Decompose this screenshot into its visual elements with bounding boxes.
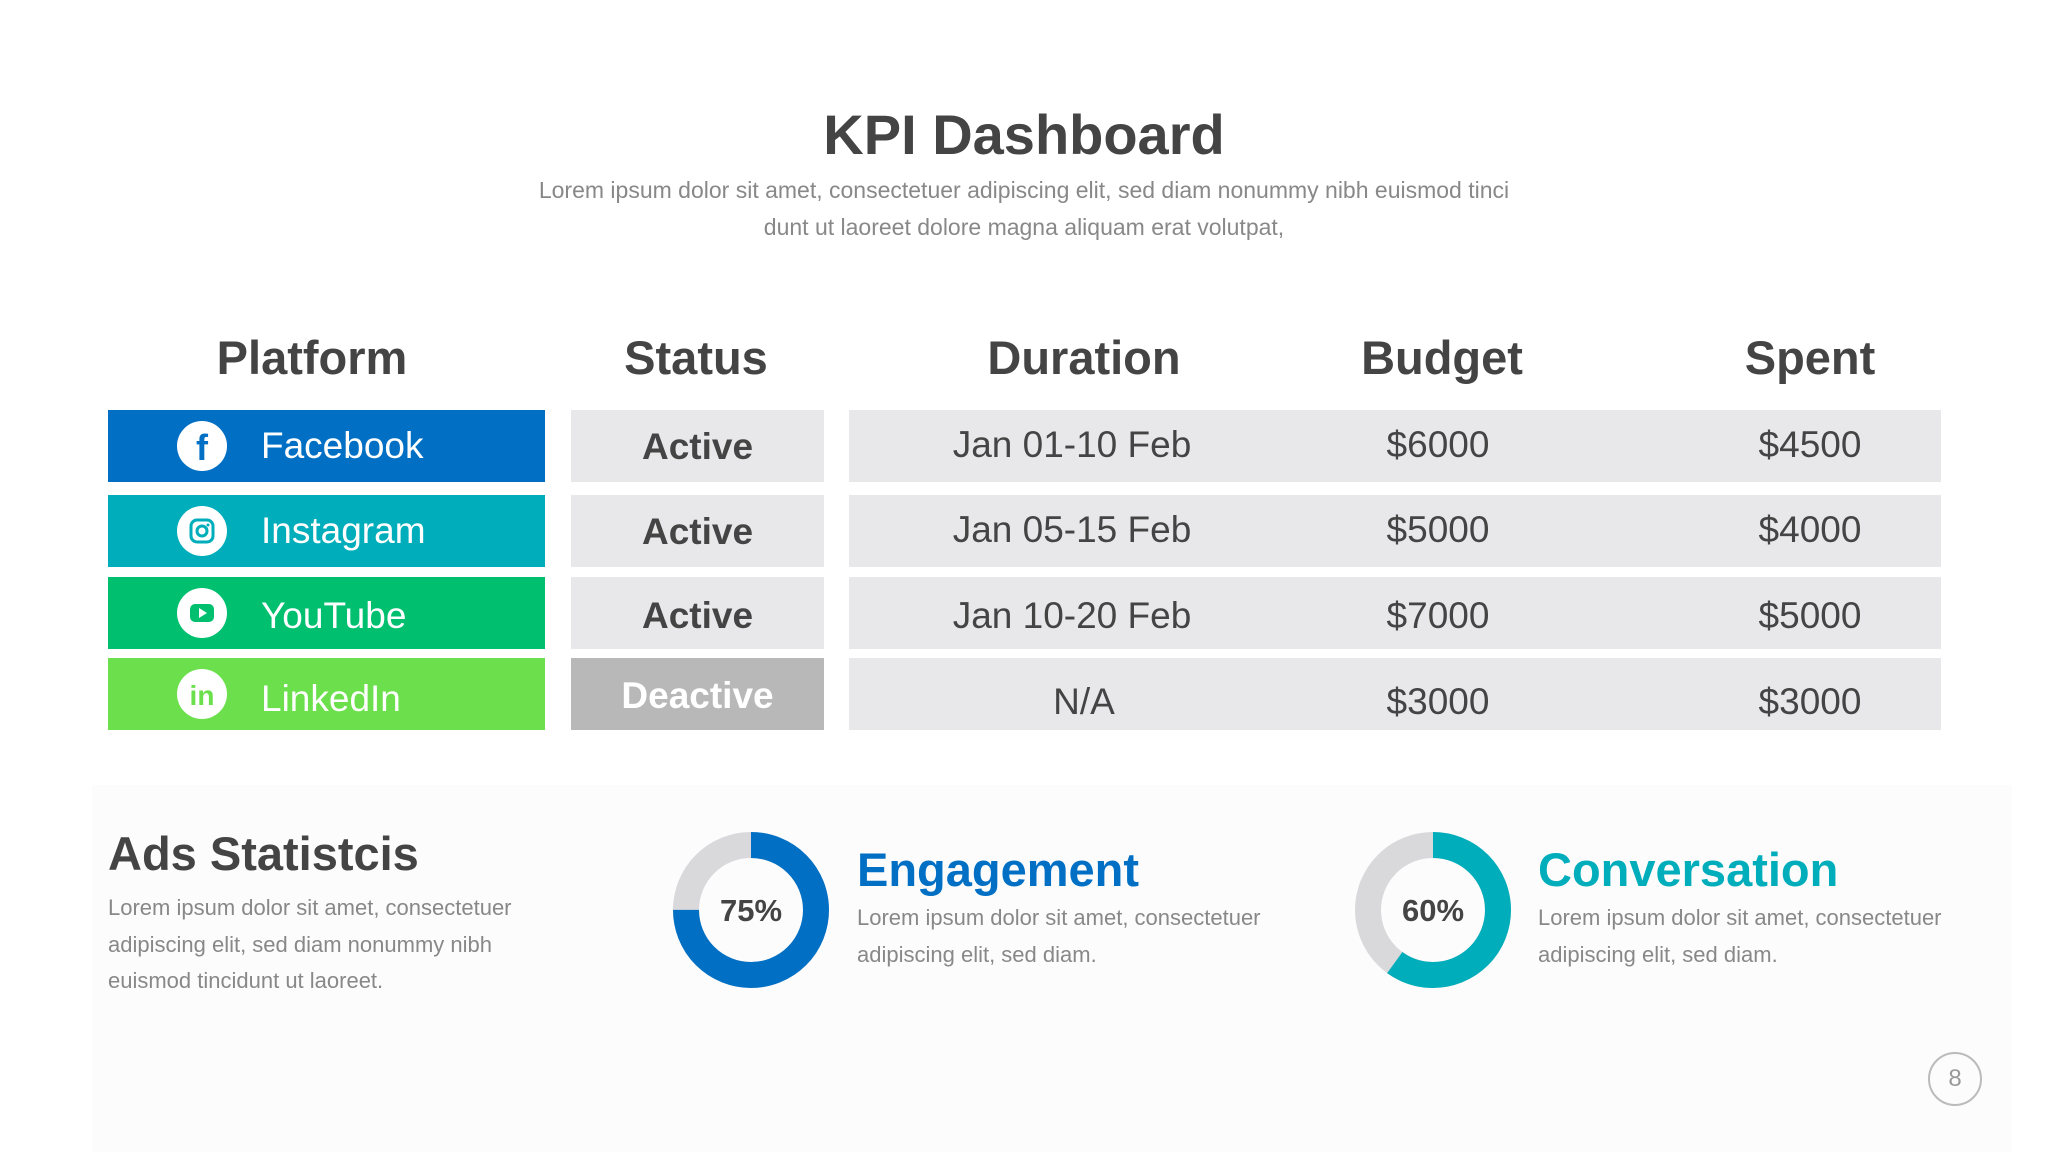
conversation text: Lorem ipsum dolor sit amet, consectetuer adipiscing elit, sed diam. xyxy=(1538,905,1942,967)
conversation heading: Conversation xyxy=(1538,843,1838,896)
page number xyxy=(1928,1052,1982,1106)
subtitle: Lorem ipsum dolor sit amet, consectetuer adipiscing elit, sed diam nonummy nibh euismod tinci xyxy=(539,177,1509,203)
data row 4: $3000 xyxy=(1387,681,1489,722)
ads statistics text: Lorem ipsum dolor sit amet, consectetuer adipiscing elit, sed diam nonummy nibh euismod tincidunt ut laoreet. xyxy=(108,895,512,993)
data row 4: $3000 xyxy=(1759,681,1861,722)
header: status: Status xyxy=(624,331,768,384)
data row 3: $7000 xyxy=(1387,595,1489,636)
platform: instagram: Instagram xyxy=(261,510,426,551)
data row 3: $5000 xyxy=(1759,595,1861,636)
platform: linkedin xyxy=(108,658,545,730)
data row 3: Jan 10-20 Feb xyxy=(953,595,1191,636)
header: spent: Spent xyxy=(1745,331,1875,384)
platform: youtube xyxy=(108,577,545,649)
title: KPI Dashboard xyxy=(823,103,1225,166)
status: row 4 xyxy=(571,658,824,730)
subtitle: dunt ut laoreet dolore magna aliquam erat volutpat, xyxy=(764,214,1284,240)
data row 1: $4500 xyxy=(1759,424,1861,465)
header: duration: Duration xyxy=(987,331,1181,384)
status: row 2 xyxy=(571,495,824,567)
data row 1: $6000 xyxy=(1387,424,1489,465)
donut: conversation 60% xyxy=(1355,832,1511,988)
ads statistics heading: Ads Statistcis xyxy=(108,827,419,880)
platform: facebook: Facebook xyxy=(261,425,424,466)
data row 2 xyxy=(849,495,1941,567)
platform: facebook xyxy=(108,410,545,482)
header: platform: Platform xyxy=(217,331,407,384)
status: row 3: Active xyxy=(642,595,753,636)
status: row 3 xyxy=(571,577,824,649)
platform: linkedin: LinkedIn xyxy=(261,678,401,719)
donut: engagement 75%: 75% xyxy=(720,893,782,928)
data row 3 xyxy=(849,577,1941,649)
donut: conversation 60%: 60% xyxy=(1402,893,1464,928)
engagement heading: Engagement xyxy=(857,843,1139,896)
data row 2: Jan 05-15 Feb xyxy=(953,509,1191,550)
platform: linkedin: in xyxy=(190,680,214,711)
platform: facebook: f xyxy=(196,427,209,468)
status: row 2: Active xyxy=(642,511,753,552)
data row 4: N/A xyxy=(1053,681,1115,722)
status: row 4: Deactive xyxy=(621,675,774,716)
status: row 1: Active xyxy=(642,426,753,467)
page number: 8 xyxy=(1948,1065,1962,1092)
data row 4 xyxy=(849,658,1941,730)
data row 1: Jan 01-10 Feb xyxy=(953,424,1191,465)
data row 1 xyxy=(849,410,1941,482)
donut: engagement 75% xyxy=(673,832,829,988)
subtitle xyxy=(539,177,1509,240)
platform: instagram xyxy=(108,495,545,567)
data row 2: $5000 xyxy=(1387,509,1489,550)
platform: youtube: YouTube xyxy=(261,595,406,636)
engagement text: Lorem ipsum dolor sit amet, consectetuer adipiscing elit, sed diam. xyxy=(857,905,1261,967)
header: budget: Budget xyxy=(1361,331,1523,384)
status: row 1 xyxy=(571,410,824,482)
bottom panel xyxy=(92,785,2012,1152)
data row 2: $4000 xyxy=(1759,509,1861,550)
